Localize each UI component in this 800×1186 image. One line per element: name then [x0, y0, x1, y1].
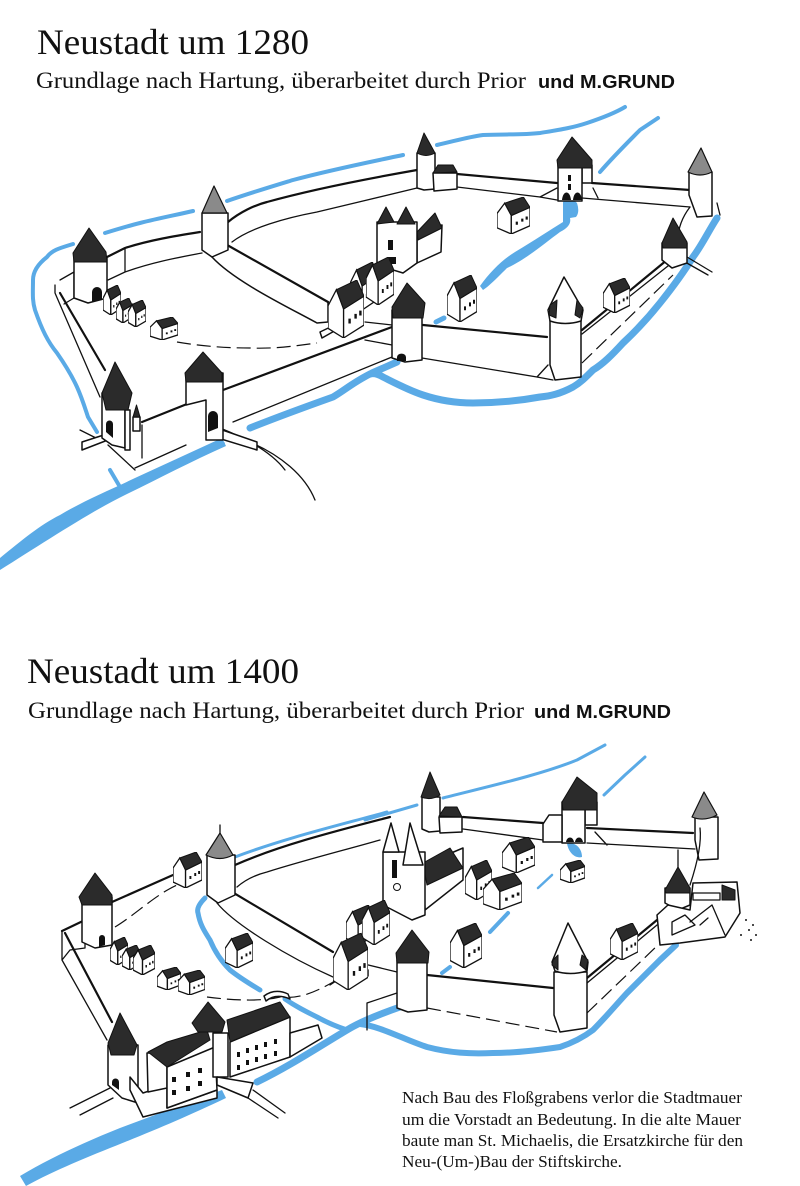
tower: south west gate: [108, 1013, 138, 1103]
subtitle 1280: Grundlage nach Hartung, überarbeitet durch Prior: [36, 68, 526, 93]
caption text: Nach Bau des Floßgrabens verlor die Stadtmauer: [402, 1088, 742, 1107]
tower: north with house: [421, 772, 462, 833]
city walls 1280: [55, 170, 720, 500]
tower: upper left gate: [73, 228, 107, 303]
tower: north east round: [688, 148, 712, 217]
church: [377, 207, 442, 273]
tower: upper left gate: [79, 873, 112, 948]
river and moat 1280: [0, 107, 717, 570]
tower: north east round: [690, 792, 718, 885]
caption text: um die Vorstadt an Bedeutung. In die alte Mauer: [402, 1110, 741, 1129]
tower: centre gate: [396, 930, 429, 1012]
map: town in 1400: [20, 745, 757, 1186]
tower: north gate: [543, 777, 597, 843]
buildings 1280: [103, 197, 630, 340]
tower: round left: [206, 825, 235, 903]
city walls 1400: [62, 817, 695, 1118]
river and moat 1400: [20, 745, 676, 1186]
tower: south round: [548, 277, 583, 380]
towers 1280: [73, 133, 712, 450]
buildings 1400: [110, 823, 638, 995]
caption text: [402, 1088, 744, 1171]
tower: lower left gate: [102, 362, 140, 450]
caption text: baute man St. Michaelis, die Ersatzkirche für den: [402, 1131, 744, 1150]
subtitle 1280: und M.GRUND: [538, 72, 675, 92]
tower: east gate: [665, 850, 690, 910]
subtitle 1400: Grundlage nach Hartung, überarbeitet durch Prior: [28, 698, 524, 723]
towers 1400: [79, 772, 740, 1103]
title: Neustadt um 1400: Neustadt um 1400: [27, 651, 299, 691]
tower: east gate: [662, 218, 687, 268]
church: [383, 823, 463, 920]
tower: round top left: [202, 186, 228, 257]
castle St. Michaelis: [130, 1002, 322, 1117]
sketch dots east: [740, 920, 757, 940]
bridge over the Floßgraben: [264, 991, 290, 1001]
tower: south round: [552, 923, 588, 1032]
east castle: [657, 882, 740, 945]
tower: lower gate: [185, 352, 223, 440]
title: Neustadt um 1280: Neustadt um 1280: [37, 22, 309, 62]
caption text: Neu-(Um-)Bau der Stiftskirche.: [402, 1152, 622, 1171]
tower: north gate: [557, 137, 592, 201]
subtitle 1400: und M.GRUND: [534, 702, 671, 722]
tower: centre gate: [392, 283, 425, 362]
tower: north with house: [417, 133, 457, 191]
map: town in 1280: [0, 107, 720, 570]
